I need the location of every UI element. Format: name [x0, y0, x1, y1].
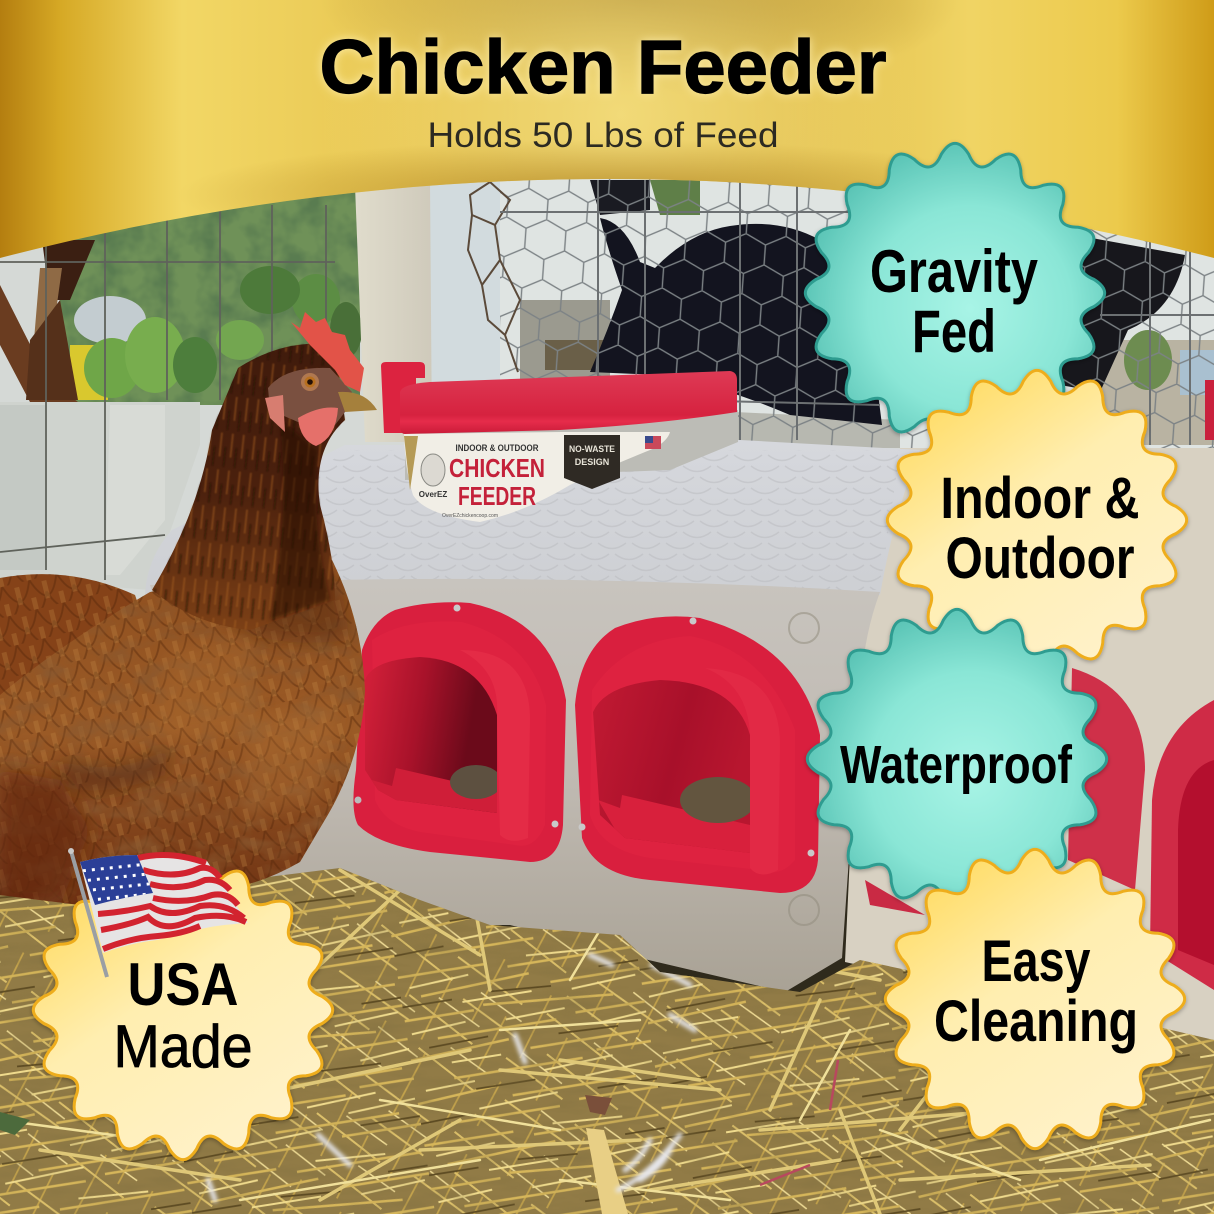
icon: American flag: [68, 848, 248, 977]
red feed port: right: [575, 616, 820, 893]
badge: Waterproof: Waterproof: [840, 735, 1073, 795]
badge: Gravity Fed: [805, 143, 1105, 443]
right backdrop: [500, 178, 1214, 448]
feeder body: [145, 362, 920, 992]
badge: USA Made: Made: [114, 1013, 252, 1080]
feeder front: [150, 579, 880, 992]
feeder label: DESIGN: [575, 457, 609, 467]
photo background: coop fence and yard: [0, 170, 1214, 1060]
chicken wire: [500, 178, 1214, 448]
title: Chicken Feeder: [320, 25, 886, 110]
badge: Indoor and Outdoor: Outdoor: [946, 526, 1134, 591]
feeder label: OverEZchickencoop.com: [442, 513, 498, 519]
feeder label: INDOOR & OUTDOOR: [456, 443, 539, 454]
header banner: [0, 0, 1214, 258]
hen head: [268, 368, 352, 425]
feeder roof: [145, 440, 920, 600]
badge: Indoor and Outdoor: Indoor &: [940, 466, 1140, 531]
badge: USA Made: [33, 860, 333, 1160]
second feeder at right: [845, 380, 1214, 1070]
back hen: [0, 574, 150, 760]
hen: [0, 312, 377, 910]
badge: Gravity Fed: Gravity: [870, 238, 1039, 305]
hen neck: [152, 344, 345, 630]
hen body: [0, 560, 370, 910]
badge: Easy Cleaning: Easy: [982, 929, 1090, 994]
feathers and debris: [586, 1128, 628, 1214]
feeder label: FEEDER: [458, 481, 536, 511]
wooden post and brace: [0, 240, 95, 402]
wattle: [298, 407, 338, 446]
white fence post: [355, 182, 432, 442]
feeder lid and handle: [381, 362, 737, 434]
badge: Waterproof: [807, 609, 1107, 909]
feeder label: CHICKEN: [449, 453, 545, 483]
black chicken behind wire: [590, 218, 882, 425]
badge: Easy Cleaning: [885, 849, 1185, 1149]
feeder label: NO-WASTE: [569, 444, 615, 455]
badge: Indoor and Outdoor: [887, 370, 1187, 670]
title: Chicken Feeder: [320, 25, 886, 110]
subtitle: Holds 50 Lbs of Feed: [428, 116, 778, 155]
red feed port: left: [353, 602, 566, 862]
welded wire grid left: [0, 205, 335, 580]
loose straws: [40, 870, 1150, 1214]
badge: USA Made: USA: [128, 951, 238, 1018]
badge: Gravity Fed: Fed: [912, 298, 996, 365]
badge: Easy Cleaning: Cleaning: [934, 989, 1138, 1054]
concrete wall: [0, 402, 200, 590]
foliage behind fence: [60, 190, 362, 405]
straw ground: [0, 860, 1214, 1214]
comb: [291, 312, 364, 392]
feeder label: [404, 432, 670, 522]
feeder neck: [405, 410, 738, 480]
feeder label: OverEZ: [419, 490, 447, 499]
